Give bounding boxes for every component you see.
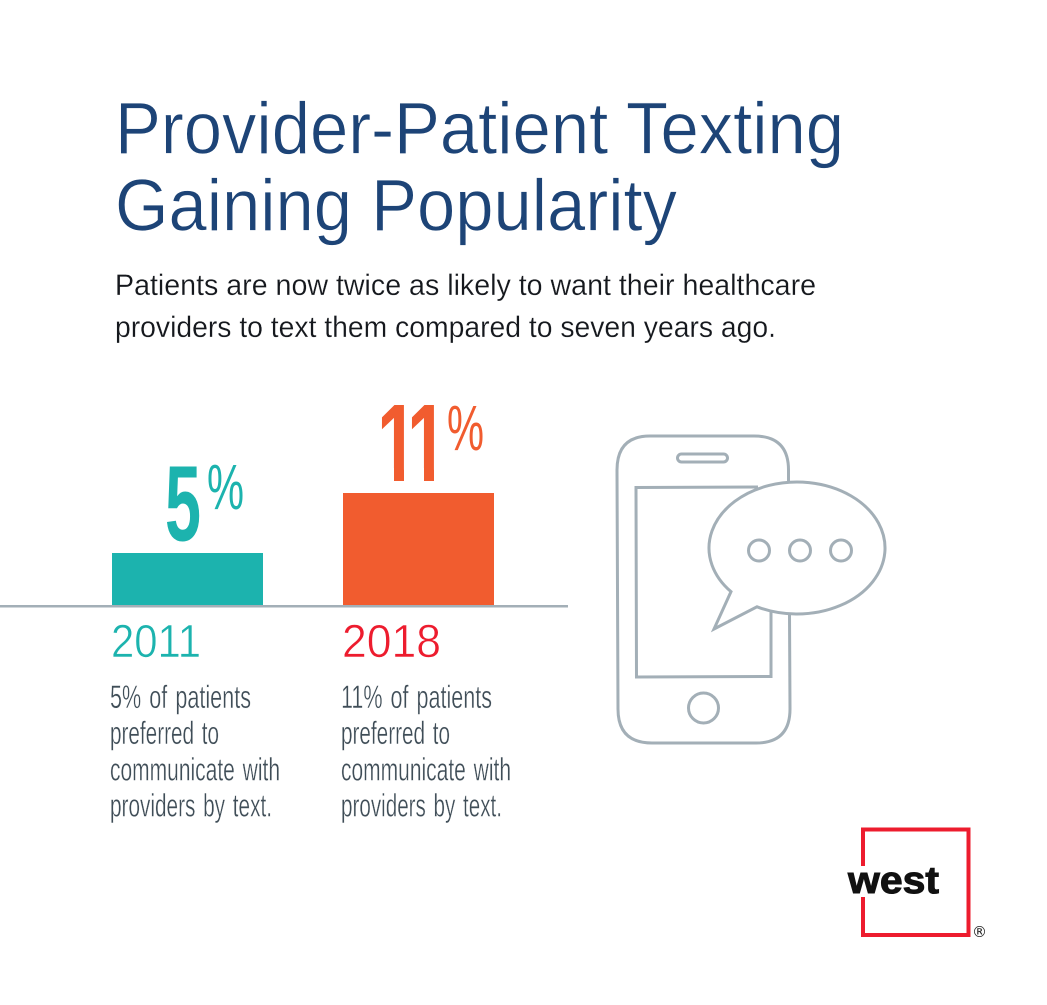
- bar chart: [0, 405, 568, 658]
- value: 11%: %: [447, 392, 484, 464]
- logo square: [863, 830, 968, 935]
- text block: 2018 description: 11% of patients: [341, 679, 492, 715]
- subtitle: [115, 269, 816, 344]
- bubble dots: [748, 540, 770, 561]
- phone speaker: [678, 454, 728, 462]
- bar: 2011: [112, 553, 263, 606]
- text block: 2018 description: providers by text.: [341, 788, 502, 824]
- text block: 2011 description: preferred to: [110, 715, 219, 751]
- phone body: [617, 436, 790, 743]
- subtitle: providers to text them compared to seven years ago.: [115, 311, 776, 344]
- text block: 2011 description: 5% of patients: [110, 679, 251, 715]
- title: [115, 88, 844, 246]
- value: 11%: 1: [407, 382, 447, 505]
- text block: 2011 description: [110, 679, 280, 824]
- subtitle: Patients are now twice as likely to want their healthcare: [115, 269, 816, 302]
- value: 5%: 5: [165, 442, 201, 564]
- speech bubble: [709, 482, 885, 629]
- title: Gaining Popularity: [115, 166, 677, 246]
- registered mark: ®: [972, 923, 987, 941]
- text block: 2018 description: [341, 679, 511, 824]
- infographic canvas: [0, 100, 985, 937]
- value: 11%: [382, 405, 482, 481]
- text block: 2018 description: communicate with: [341, 752, 511, 788]
- year: 2011: 2011: [111, 615, 201, 667]
- phone home button: [688, 693, 718, 723]
- phone screen: [636, 487, 771, 677]
- year: 2018: 2018: [342, 615, 441, 667]
- value: 11%: 1: [377, 382, 417, 505]
- text block: 2018 description: preferred to: [341, 715, 450, 751]
- icon: smartphone with speech bubble: [617, 436, 885, 743]
- logo wordmark: west: [847, 860, 939, 902]
- chart baseline: [0, 605, 568, 608]
- text block: 2011 description: providers by text.: [110, 788, 272, 824]
- text block: 2011 description: communicate with: [110, 752, 280, 788]
- value: 5%: %: [207, 451, 244, 523]
- bar: 2018: [343, 493, 494, 606]
- title: Provider-Patient Texting: [115, 88, 844, 170]
- logo: west: [847, 830, 987, 941]
